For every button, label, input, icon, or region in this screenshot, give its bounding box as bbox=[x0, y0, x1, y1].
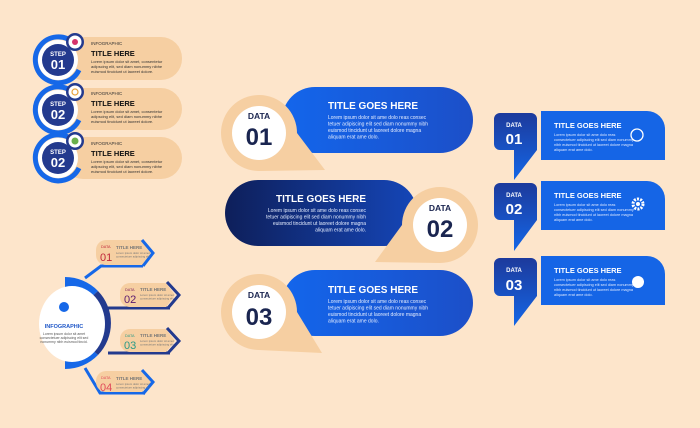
tag row 03: Lorem ipsum dolor sit ame dolo reas bbox=[554, 278, 616, 282]
row 03: 03 bbox=[246, 304, 272, 331]
step 3: INFOGRAPHIC bbox=[91, 141, 123, 146]
row 02: aliquam erat ame dolo. bbox=[315, 228, 366, 234]
ring bbox=[39, 277, 111, 369]
ring: nonummy nibh euismod tincid. bbox=[40, 340, 88, 344]
box 04: TITLE HERE bbox=[116, 376, 142, 381]
box 01 bbox=[96, 240, 153, 266]
box 01: consectetuer adipiscing elit bbox=[116, 254, 150, 258]
step 1: STEP bbox=[50, 52, 66, 58]
panel: data rows center bbox=[221, 87, 478, 353]
box 01: DATA bbox=[101, 245, 111, 249]
connectors bbox=[85, 266, 170, 393]
row 02: tetuer adipiscing elit sed diam nonummy nibh bbox=[266, 214, 366, 220]
tag row 02: consectetuer adipiscing elit sed diam nonummy bbox=[554, 208, 634, 212]
box 03 bbox=[120, 328, 179, 353]
box 04: Lorem ipsum dolor sit amet bbox=[116, 382, 150, 386]
step 2: 02 bbox=[51, 107, 65, 122]
box 03: 03 bbox=[124, 340, 136, 352]
step 2: TITLE HERE bbox=[91, 99, 135, 108]
row 01 bbox=[221, 87, 473, 171]
row 01: Lorem ipsum dolor sit ame dolo reas consec bbox=[328, 115, 427, 121]
step 1: 01 bbox=[51, 57, 65, 72]
tag row 03: consectetuer adipiscing elit sed diam nonummy bbox=[554, 283, 634, 287]
tag row 02: Lorem ipsum dolor sit ame dolo reas bbox=[554, 203, 616, 207]
box 03: consectetuer adipiscing elit bbox=[140, 342, 174, 346]
ring: Lorem ipsum dolor sit amet bbox=[43, 332, 85, 336]
row 03: DATA bbox=[248, 290, 270, 300]
tag row 02 bbox=[494, 181, 665, 251]
box 02 bbox=[120, 282, 179, 308]
box 02: consectetuer adipiscing elit bbox=[140, 296, 174, 300]
row 02: DATA bbox=[429, 203, 451, 213]
row 03: aliquam erat ame dolo. bbox=[328, 318, 379, 324]
step 2: INFOGRAPHIC bbox=[91, 91, 123, 96]
step 2: Lorem ipsum dolor sit amet, consentetur bbox=[91, 109, 163, 114]
ring: consectetuer adipiscing elit sed bbox=[40, 336, 88, 340]
tag row 01: TITLE GOES HERE bbox=[554, 121, 622, 130]
tag row 03: aliquam erat ame dolo. bbox=[554, 293, 593, 297]
tag row 01: aliquam erat ame dolo. bbox=[554, 148, 593, 152]
panel: radial infographic bbox=[39, 240, 179, 394]
box 04 bbox=[96, 370, 153, 394]
step 3: 02 bbox=[51, 155, 65, 170]
step 3: STEP bbox=[50, 150, 66, 156]
box 01: Lorem ipsum dolor sit amet bbox=[116, 251, 150, 255]
ring: INFOGRAPHIC bbox=[45, 324, 83, 330]
box 02: 02 bbox=[124, 294, 136, 306]
step 2: adipscing elit, sed diam nonummy nibhe bbox=[91, 114, 163, 119]
box 02: DATA bbox=[125, 288, 135, 292]
row 03: euismod tincidunt ut laoreet dolore magna bbox=[328, 312, 421, 318]
step 2: STEP bbox=[50, 102, 66, 108]
box 03: DATA bbox=[125, 334, 135, 338]
row 01: DATA bbox=[248, 111, 270, 121]
step 3: adipscing elit, sed diam nonummy nibhe bbox=[91, 164, 163, 169]
row 01: tetuer adipiscing elit sed diam nonummy nibh bbox=[328, 122, 428, 128]
tag row 01: Lorem ipsum dolor sit ame dolo reas bbox=[554, 133, 616, 137]
step 1: euismod tincidunt ut laoreet dolore. bbox=[91, 69, 153, 74]
box 01: TITLE HERE bbox=[116, 245, 142, 250]
panel: steps list bbox=[35, 33, 182, 181]
row 02 bbox=[225, 180, 478, 263]
tag row 03 bbox=[494, 256, 665, 326]
tag row 03: DATA bbox=[506, 268, 523, 274]
tag row 02: nibh euismod tincidunt ut laoreet dolore magna bbox=[554, 213, 634, 217]
tag row 02: TITLE GOES HERE bbox=[554, 191, 622, 200]
tag row 01 bbox=[494, 111, 665, 180]
tag row 01: consectetuer adipiscing elit sed diam nonummy bbox=[554, 138, 634, 142]
tag row 03: 03 bbox=[506, 277, 522, 294]
row 03: tetuer adipiscing elit sed diam nonummy nibh bbox=[328, 306, 428, 312]
tag row 02: 02 bbox=[506, 201, 522, 218]
step 3 bbox=[35, 132, 182, 181]
box 01: 01 bbox=[100, 252, 112, 264]
tag row 03: TITLE GOES HERE bbox=[554, 266, 622, 275]
box 04: consectetuer adipiscing elit bbox=[116, 386, 150, 390]
row 02: Lorem ipsum dolor sit ame dolo reas consec bbox=[268, 208, 366, 214]
step 3: TITLE HERE bbox=[91, 149, 135, 158]
row 02: 02 bbox=[427, 216, 453, 243]
row 02: euismod tincidunt ut laoreet dolore magna bbox=[273, 221, 366, 227]
row 01: TITLE GOES HERE bbox=[328, 101, 418, 112]
tag row 01: nibh euismod tincidunt ut laoreet dolore magna bbox=[554, 143, 634, 147]
step 2: euismod tincidunt ut laoreet dolore. bbox=[91, 119, 153, 124]
row 01: aliquam erat ame dolo. bbox=[328, 134, 379, 140]
step 1: Lorem ipsum dolor sit amet, consentetur bbox=[91, 59, 163, 64]
box 03: Lorem ipsum dolor sit amet bbox=[140, 339, 174, 343]
box 02: TITLE HERE bbox=[140, 287, 166, 292]
row 03: Lorem ipsum dolor sit ame dolo reas consec bbox=[328, 299, 427, 305]
tag row 02: DATA bbox=[506, 193, 523, 199]
step 2 bbox=[35, 83, 182, 133]
row 03 bbox=[221, 270, 473, 353]
box 03: TITLE HERE bbox=[140, 333, 166, 338]
step 1: INFOGRAPHIC bbox=[91, 41, 123, 46]
step 1: TITLE HERE bbox=[91, 49, 135, 58]
step 3: euismod tincidunt ut laoreet dolore. bbox=[91, 169, 153, 174]
step 1 bbox=[35, 33, 182, 83]
box 04: DATA bbox=[101, 376, 111, 380]
tag row 03: nibh euismod tincidunt ut laoreet dolore magna bbox=[554, 288, 634, 292]
row 02: TITLE GOES HERE bbox=[276, 194, 366, 205]
row 01: euismod tincidunt ut laoreet dolore magna bbox=[328, 128, 421, 134]
box 02: Lorem ipsum dolor sit amet bbox=[140, 293, 174, 297]
step 3: Lorem ipsum dolor sit amet, consentetur bbox=[91, 159, 163, 164]
tag row 01: DATA bbox=[506, 123, 523, 129]
step 1: adipscing elit, sed diam nonummy nibhe bbox=[91, 64, 163, 69]
tag row 02: aliquam erat ame dolo. bbox=[554, 218, 593, 222]
panel: right tags bbox=[494, 111, 665, 326]
tag row 01: 01 bbox=[506, 131, 522, 148]
row 01: 01 bbox=[246, 124, 272, 151]
box 04: 04 bbox=[100, 382, 112, 394]
row 03: TITLE GOES HERE bbox=[328, 285, 418, 296]
